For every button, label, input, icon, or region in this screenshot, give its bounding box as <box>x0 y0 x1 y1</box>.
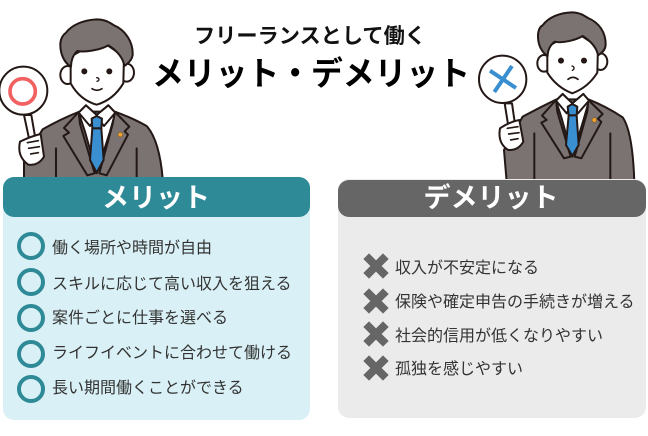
merit item 4 <box>19 342 292 366</box>
merit item 3: 案件ごとに仕事を選べる <box>52 309 228 327</box>
title <box>152 24 470 92</box>
merit item 1 <box>19 234 212 258</box>
illustration: businessman with cross sign <box>479 12 634 182</box>
demerit header bar <box>338 180 646 217</box>
panel: demerits <box>338 179 646 418</box>
title line 1: フリーランスとして働く <box>194 24 426 48</box>
merit heading: メリット <box>102 183 210 213</box>
panel background <box>338 179 646 418</box>
panel: merits <box>3 177 310 420</box>
merit item 3 <box>19 306 228 330</box>
title line 2: メリット・デメリット <box>152 55 470 92</box>
merit item 5: 長い期間働くことができる <box>52 379 244 397</box>
demerit item 1: 収入が不安定になる <box>395 259 539 277</box>
demerit item 3: 社会的信用が低くなりやすい <box>395 327 603 345</box>
merit item 2: スキルに応じて高い収入を狙える <box>52 275 292 293</box>
merit item 5 <box>19 377 244 401</box>
demerit heading: デメリット <box>424 182 558 213</box>
demerit item 2: 保険や確定申告の手続きが増える <box>395 293 635 311</box>
merit item 1: 働く場所や時間が自由 <box>52 239 212 257</box>
merit item 2 <box>19 270 292 294</box>
merit item 4: ライフイベントに合わせて働ける <box>52 344 292 362</box>
merit header bar <box>3 177 310 217</box>
demerit item 4: 孤独を感じやすい <box>395 360 523 378</box>
panel background <box>3 177 310 420</box>
illustration: businessman with circle sign <box>0 19 163 178</box>
